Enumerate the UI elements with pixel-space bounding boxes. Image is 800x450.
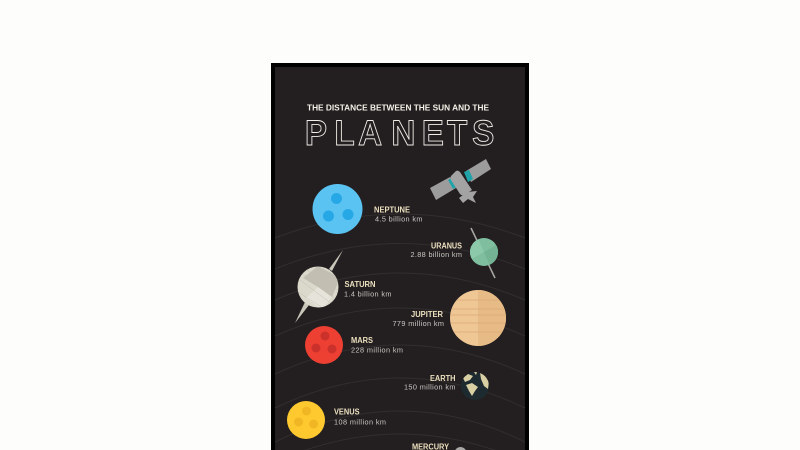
label: Earth <box>404 374 456 392</box>
planet: Saturn <box>295 250 343 323</box>
label: Uranus: 2.88 billion km <box>410 250 462 259</box>
label: Venus <box>334 408 386 426</box>
orbit lines <box>275 214 525 450</box>
panel: poster background <box>273 65 527 450</box>
planet: Mars <box>305 326 343 364</box>
label: Uranus: URANUS <box>431 242 463 250</box>
label: Saturn <box>344 280 392 298</box>
planet: Earth <box>461 372 489 400</box>
label: Jupiter: JUPITER <box>411 310 443 319</box>
label: Earth: 150 million km <box>404 382 456 392</box>
heading: subtitle: THE DISTANCE BETWEEN THE SUN AND THE <box>307 102 489 112</box>
label: Neptune: NEPTUNE <box>374 206 411 214</box>
label: Mars: MARS <box>351 336 374 345</box>
planet: Uranus <box>470 228 498 278</box>
label: Saturn: SATURN <box>344 280 376 289</box>
label: Uranus <box>410 242 463 259</box>
label: Neptune: 4.5 billion km <box>375 214 422 224</box>
label: Mars <box>351 336 403 354</box>
planet: Mercury <box>454 447 466 450</box>
label: Jupiter: 779 million km <box>392 319 444 328</box>
label: Saturn: 1.4 billion km <box>344 290 392 298</box>
label: Venus: VENUS <box>334 408 360 416</box>
label: Mars: 228 million km <box>351 346 403 354</box>
label: Jupiter <box>392 310 444 328</box>
label: Earth: EARTH <box>430 374 456 383</box>
label: Venus: 108 million km <box>334 418 386 426</box>
planet: Jupiter <box>450 290 506 346</box>
planet: Venus <box>287 401 325 439</box>
label: Neptune <box>374 206 422 224</box>
planet: Neptune <box>312 184 362 234</box>
icon: satellite <box>430 159 491 203</box>
heading: planets outlined title: PLANETS <box>305 114 494 153</box>
